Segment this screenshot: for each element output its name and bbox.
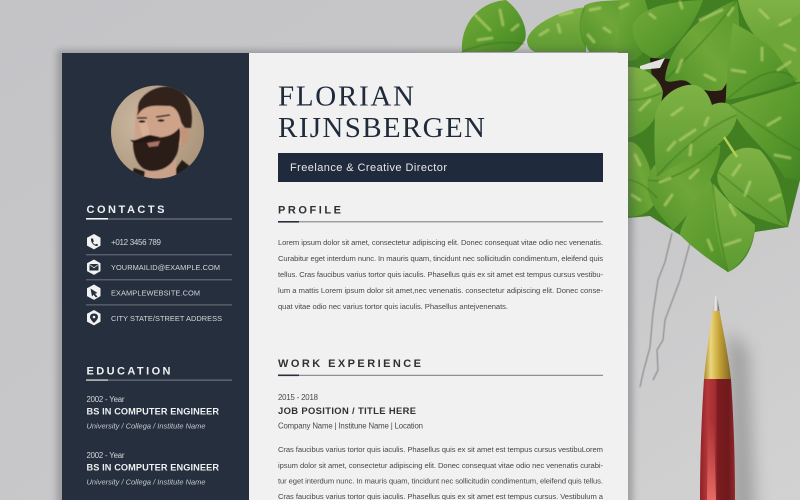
contact: website bbox=[87, 284, 200, 300]
red and gold pen bbox=[700, 295, 735, 500]
job title banner: Freelance & Creative Director bbox=[290, 162, 447, 174]
work entry: Company Name | Institune Name | Location bbox=[278, 422, 423, 430]
leaf mass underlay bbox=[628, 0, 800, 272]
heading: profile: PROFILE bbox=[278, 204, 341, 216]
work description bbox=[278, 445, 604, 500]
name title: FLORIAN bbox=[278, 80, 414, 112]
job title banner bbox=[278, 153, 603, 182]
profile photo bbox=[111, 85, 204, 180]
contact list bbox=[86, 234, 232, 325]
education entry 2 bbox=[86, 451, 219, 486]
resume paper bbox=[62, 53, 628, 500]
work description: ipsum dolor sit amet, consectetur adipiscing elit. Donec consequat vitae odio nec venenatis curabi- bbox=[278, 461, 603, 470]
profile text: Lorem ipsum dolor sit amet, consectetur adipiscing elit. Donec consequat vitae odio nec venenatis. bbox=[278, 238, 603, 247]
profile text: lum a mattis Lorem ipsum dolor sit amet,nec venenatis. consectetur adipiscing elit. Donec conse- bbox=[278, 286, 603, 295]
work entry bbox=[278, 393, 604, 500]
heading: education: EDUCATION bbox=[86, 366, 171, 378]
contact: phone bbox=[87, 234, 162, 249]
name title: RIJNSBERGEN bbox=[278, 112, 485, 144]
profile text bbox=[278, 238, 603, 311]
work description: tur eget interdum nunc. In mauris quam, tincidunt nec sollicitudin condimentum, eleifend quis tellus. bbox=[278, 476, 603, 486]
contact: phone: +012 3456 789 bbox=[111, 238, 162, 247]
education entry 1: 2002 - Year bbox=[86, 395, 125, 404]
leaf veins and shadows bbox=[462, 0, 800, 272]
profile text: quat vitae odio nec varius tortor quis iaculis. Phasellus antejvenenats. bbox=[278, 302, 508, 311]
contact: website: EXAMPLEWEBSITE.COM bbox=[111, 288, 200, 298]
education entry 1 bbox=[86, 395, 219, 430]
profile text: Curabitur eget interdum nunc. In mauris quam, tincidunt nec sollicitudin condimentum, eleifend quis bbox=[278, 254, 603, 263]
education entry 2: BS IN COMPUTER ENGINEER bbox=[86, 462, 219, 472]
education entry 1: BS IN COMPUTER ENGINEER bbox=[86, 406, 219, 416]
work description: Cras faucibus varius tortor quis iaculis. Phasellus quis ex sit amet est tempus cursus vestibuLorem bbox=[278, 445, 603, 454]
marble cracks bbox=[640, 233, 690, 387]
education entry 1: University / Collega / Institute Name bbox=[86, 422, 206, 430]
pen shadow bbox=[728, 330, 756, 500]
heading: work experience: WORK EXPERIENCE bbox=[278, 358, 421, 370]
panel: sidebar bbox=[62, 53, 249, 500]
education entry 2: 2002 - Year bbox=[86, 451, 125, 460]
name title bbox=[278, 80, 485, 144]
leaf variegation bbox=[475, 2, 795, 250]
resume paper shadow bbox=[57, 50, 633, 500]
soil bbox=[650, 58, 730, 110]
work entry: JOB POSITION / TITLE HERE bbox=[278, 405, 416, 416]
work entry: 2015 - 2018 bbox=[278, 393, 318, 402]
contact: address: CITY STATE/STREET ADDRESS bbox=[111, 314, 222, 323]
contact: address bbox=[87, 310, 222, 325]
profile text: tellus. Cras faucibus varius tortor quis iaculis. Phasellus quis ex sit amet est tempus cursus vestibu- bbox=[278, 270, 603, 279]
education entry 2: University / Collega / Institute Name bbox=[86, 478, 206, 486]
plant: potted green leaves bbox=[462, 0, 800, 272]
leaf stem bbox=[724, 137, 737, 157]
contact: email: YOURMAILID@EXAMPLE.COM bbox=[111, 263, 220, 272]
pot rim bbox=[640, 58, 665, 70]
heading: contacts: CONTACTS bbox=[86, 204, 164, 216]
contact: email bbox=[87, 260, 220, 275]
